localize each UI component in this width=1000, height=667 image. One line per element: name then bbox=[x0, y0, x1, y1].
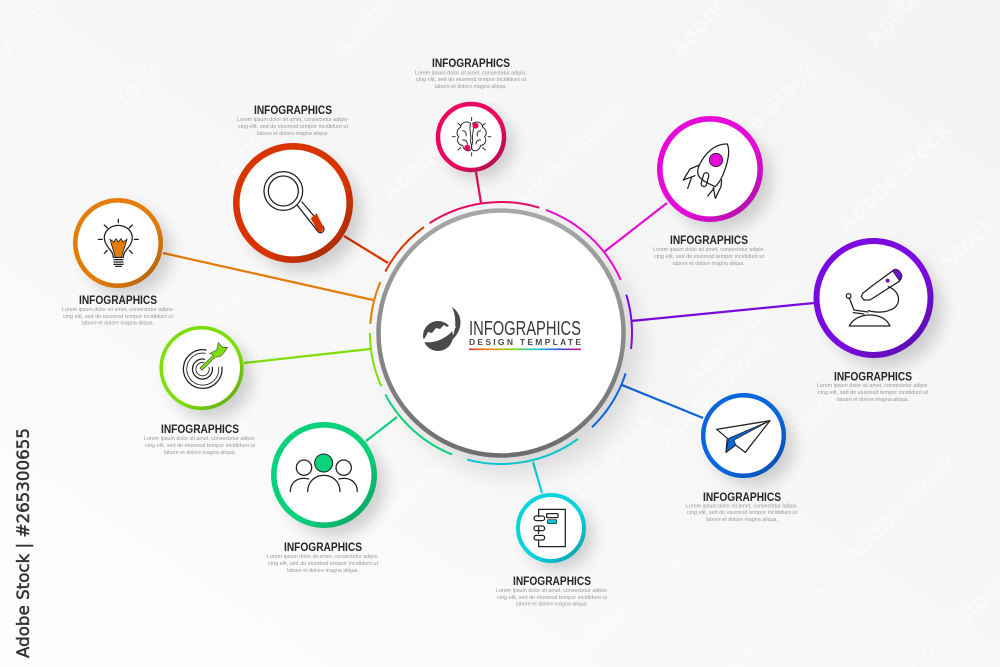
node: pink brain bbox=[438, 104, 513, 179]
watermark pattern: Adobe Stock bbox=[877, 209, 1000, 331]
heading and text: lime: cing elit, sed do eiusmod tempor incididunt ut bbox=[145, 443, 255, 449]
heading and text: red: cing elit, sed do eiusmod tempor incididunt ut bbox=[238, 124, 348, 130]
watermark pattern: Adobe Stock bbox=[156, 116, 280, 238]
logo mark bbox=[419, 307, 461, 351]
node: lime target bbox=[161, 328, 252, 419]
watermark pattern: Adobe Stock bbox=[539, 409, 663, 531]
central logo and title bbox=[419, 307, 581, 351]
watermark pattern: Adobe Stock bbox=[832, 116, 956, 238]
heading and text: purple: Lorem ipsum dolor sit amet, consectetur adipis- bbox=[817, 383, 929, 389]
heading and text: orange: Lorem ipsum dolor sit amet, consectetur adipis- bbox=[62, 307, 174, 313]
heading and text: purple: INFOGRAPHICS bbox=[834, 372, 912, 384]
node: green people bbox=[274, 425, 385, 536]
watermark pattern: Adobe Stock bbox=[507, 95, 631, 217]
watermark pattern: Adobe Stock bbox=[175, 231, 299, 353]
watermark pattern: Adobe Stock bbox=[723, 380, 847, 502]
heading and text: teal: Lorem ipsum dolor sit amet, consectetur adipis- bbox=[496, 588, 608, 594]
node: blue paper plane bbox=[703, 395, 794, 486]
heading and text: orange: labore et dolore magna aliqua. bbox=[82, 320, 154, 326]
watermark pattern: Adobe Stock bbox=[698, 56, 822, 178]
heading and text: teal: INFOGRAPHICS bbox=[513, 576, 591, 588]
heading and text: blue: INFOGRAPHICS bbox=[703, 492, 781, 504]
icon: magnifier bbox=[264, 172, 324, 233]
heading and text: blue: Lorem ipsum dolor sit amet, consectetur adipis- bbox=[686, 504, 798, 510]
heading and text: magenta: Lorem ipsum dolor sit amet, consectetur adipis- bbox=[653, 247, 765, 253]
watermark pattern: Adobe Stock bbox=[156, 448, 280, 570]
heading and text: pink: INFOGRAPHICS bbox=[432, 58, 510, 70]
heading and text: green bbox=[267, 542, 379, 574]
segmented outer arcs bbox=[318, 150, 684, 516]
heading and text: teal bbox=[496, 576, 608, 608]
heading and text: lime: INFOGRAPHICS bbox=[161, 424, 239, 436]
watermark pattern: Adobe Stock bbox=[38, 401, 162, 523]
central logo and title: DESIGN TEMPLATE bbox=[469, 337, 581, 347]
heading and text: teal: cing elit, sed do eiusmod tempor incididunt ut bbox=[497, 595, 607, 601]
connector lines bbox=[163, 172, 814, 493]
heading and text: blue bbox=[686, 492, 798, 523]
watermark pattern: Adobe Stock bbox=[41, 56, 165, 178]
node: purple microscope bbox=[816, 241, 942, 367]
heading and text: red: labore et dolore magna aliqua. bbox=[257, 131, 329, 137]
watermark pattern: Adobe Stock bbox=[838, 448, 962, 570]
heading and text: pink bbox=[415, 58, 527, 90]
heading and text: teal: labore et dolore magna aliqua. bbox=[516, 602, 588, 608]
heading and text: lime: Lorem ipsum dolor sit amet, consectetur adipis- bbox=[144, 436, 256, 442]
heading and text: lime bbox=[144, 424, 256, 456]
icon: light bulb bbox=[98, 219, 138, 266]
icon: paper plane bbox=[717, 421, 770, 452]
central circle bbox=[378, 210, 638, 472]
heading and text: magenta: labore et dolore magna aliqua. bbox=[673, 261, 745, 267]
heading and text: pink: labore et dolore magna aliqua. bbox=[435, 84, 507, 90]
node: orange bulb bbox=[75, 200, 171, 296]
watermark pattern: Adobe Stock bbox=[376, 84, 500, 206]
heading and text: pink: cing elit, sed do eiusmod tempor incididunt ut bbox=[416, 77, 526, 83]
heading and text: magenta: cing elit, sed do eiusmod tempor incididunt ut bbox=[654, 254, 764, 260]
icon: microscope bbox=[846, 269, 902, 326]
heading and text: orange bbox=[62, 295, 174, 326]
heading and text: blue: cing elit, sed do eiusmod tempor incididunt ut bbox=[687, 510, 797, 516]
heading and text: blue: labore et dolore magna aliqua. bbox=[706, 517, 778, 523]
heading and text: orange: INFOGRAPHICS bbox=[79, 295, 157, 307]
icon: people bbox=[290, 454, 357, 492]
heading and text: red bbox=[237, 105, 349, 137]
heading and text: purple: labore et dolore magna aliqua. bbox=[837, 397, 909, 403]
heading and text: green: Lorem ipsum dolor sit amet, consectetur adipis- bbox=[267, 554, 379, 560]
icon: rocket bbox=[683, 144, 729, 198]
heading and text: green: labore et dolore magna aliqua. bbox=[287, 568, 359, 574]
icon: notebook bbox=[534, 509, 565, 547]
heading and text: orange: cing elit, sed do eiusmod tempor incididunt ut bbox=[63, 314, 173, 320]
heading and text: purple bbox=[817, 372, 929, 403]
stock id label: Adobe Stock | #265300655 bbox=[14, 428, 33, 658]
heading and text: magenta bbox=[653, 235, 765, 267]
node: red search bbox=[236, 146, 361, 272]
heading and text: red: INFOGRAPHICS bbox=[254, 105, 332, 117]
heading and text: green: INFOGRAPHICS bbox=[284, 542, 362, 554]
node: magenta rocket bbox=[660, 119, 771, 230]
central logo and title: INFOGRAPHICS bbox=[469, 318, 581, 340]
icon: target and dart bbox=[183, 343, 228, 388]
watermark pattern: Adobe Stock bbox=[653, 329, 777, 451]
icon: brain bbox=[452, 117, 491, 156]
watermark pattern: Adobe Stock bbox=[679, 269, 803, 391]
watermark pattern: Adobe Stock bbox=[348, 431, 472, 553]
node: teal notebook bbox=[518, 495, 593, 570]
heading and text: purple: cing elit, sed do eiusmod tempor incididunt ut bbox=[818, 390, 928, 396]
heading and text: lime: labore et dolore magna aliqua. bbox=[164, 450, 236, 456]
heading and text: green: cing elit, sed do eiusmod tempor incididunt ut bbox=[268, 561, 378, 567]
heading and text: pink: Lorem ipsum dolor sit amet, consectetur adipis- bbox=[415, 70, 527, 76]
heading and text: red: Lorem ipsum dolor sit amet, consectetur adipis- bbox=[237, 117, 349, 123]
watermark pattern: Adobe Stock bbox=[226, 545, 350, 667]
watermark pattern: Adobe Stock bbox=[564, 545, 688, 667]
heading and text: magenta: INFOGRAPHICS bbox=[670, 235, 748, 247]
